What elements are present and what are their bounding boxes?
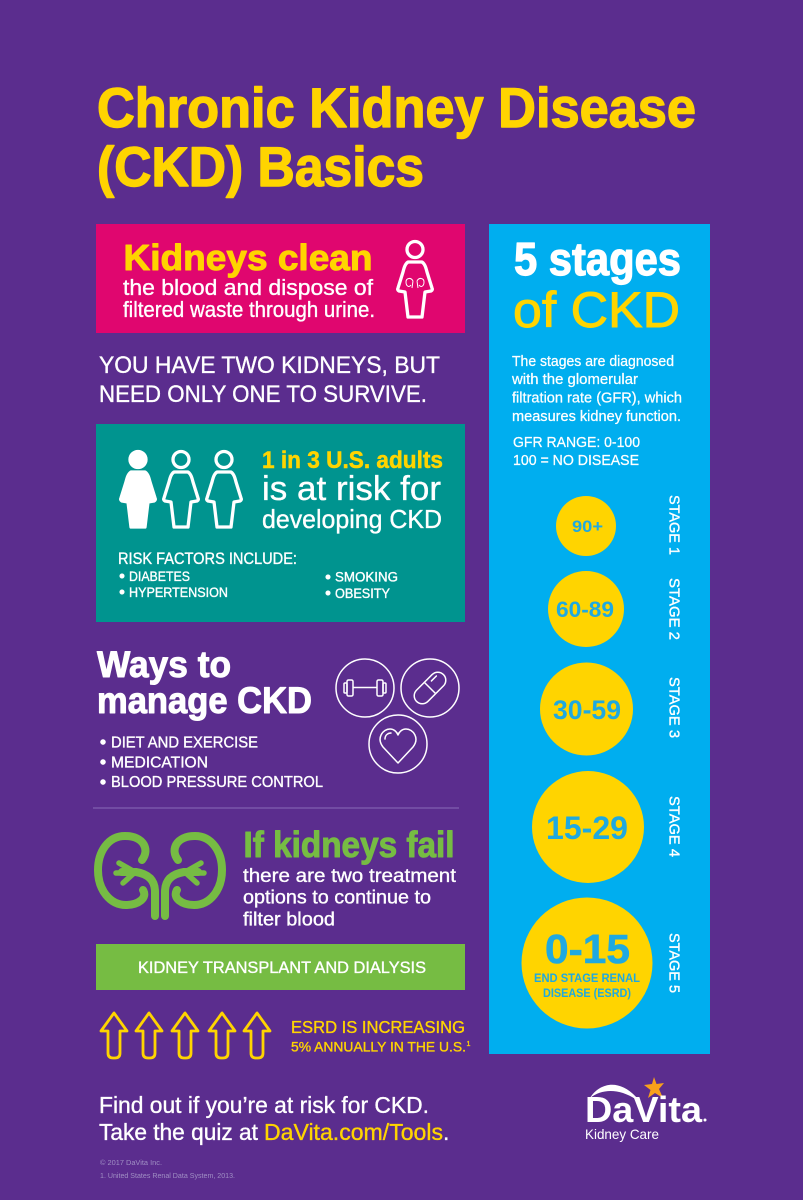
call to action: DaVita.com/Tools xyxy=(264,1119,443,1145)
panel: 5 stages of CKD xyxy=(489,224,710,1054)
logo: DaVita Kidney Care xyxy=(585,1077,706,1142)
text: treatment options: options to continue to xyxy=(243,886,431,908)
heading: kidneys clean: Kidneys clean xyxy=(124,237,372,278)
statistic: 1 in 3: developing CKD xyxy=(262,504,442,534)
heading: 5 stages: 5 stages xyxy=(514,233,681,285)
footnotes: © 2017 DaVita Inc. xyxy=(100,1159,162,1167)
stage 1: 90+ xyxy=(572,517,603,536)
icon: kidneys xyxy=(98,836,222,916)
heading: of CKD: of CKD xyxy=(513,282,680,338)
text: treatment options: filter blood xyxy=(243,908,335,930)
icon: dumbbell xyxy=(336,659,394,717)
logo: DaVita Kidney Care: DaVita xyxy=(585,1089,703,1130)
stage 3: 30-59 xyxy=(553,695,621,725)
stage 2 xyxy=(548,571,682,647)
stage 4 xyxy=(532,771,682,883)
icon: body with kidneys xyxy=(398,242,432,317)
text: GFR range: GFR RANGE: 0-100 xyxy=(513,435,640,451)
text: treatment options: there are two treatment xyxy=(243,865,457,887)
list: risk factors xyxy=(118,550,398,601)
panel: risk xyxy=(96,424,465,622)
list: risk factors: DIABETES xyxy=(129,569,190,584)
statistic: 1 in 3 xyxy=(262,447,443,534)
statement: two kidneys xyxy=(99,352,440,408)
icon: five up arrows xyxy=(101,1013,270,1058)
list: management: MEDICATION xyxy=(111,754,208,772)
banner: transplant and dialysis: KIDNEY TRANSPLANT AND DIALYSIS xyxy=(138,959,426,977)
stage 4: 15-29 xyxy=(546,810,628,846)
statistic: ESRD increasing: 5% ANNUALLY IN THE U.S. xyxy=(291,1038,466,1054)
list: management xyxy=(100,734,323,791)
stage 5: 0-15 xyxy=(545,926,630,972)
statistic: ESRD increasing: 1 xyxy=(466,1041,470,1048)
call to action: Take the quiz at xyxy=(99,1119,259,1145)
statistic: ESRD increasing xyxy=(291,1017,470,1054)
text: GFR description: with the glomerular xyxy=(511,372,638,388)
call to action xyxy=(99,1092,449,1145)
text: GFR range: 100 = NO DISEASE xyxy=(513,453,639,469)
title xyxy=(97,76,696,198)
heading: ways to manage CKD: manage CKD xyxy=(97,680,312,721)
statistic: 1 in 3: 1 in 3 U.S. adults xyxy=(262,447,443,474)
stage 2: STAGE 2 xyxy=(666,578,682,640)
list: management: BLOOD PRESSURE CONTROL xyxy=(111,774,323,791)
stage 5: STAGE 5 xyxy=(666,933,682,993)
logo: DaVita Kidney Care: Kidney Care xyxy=(585,1126,659,1142)
list: risk factors: RISK FACTORS INCLUDE: xyxy=(118,550,297,568)
footnotes: 1. United States Renal Data System, 2013. xyxy=(100,1173,235,1180)
banner: transplant and dialysis xyxy=(96,944,465,990)
list: management: DIET AND EXERCISE xyxy=(111,734,258,752)
icon: filled person xyxy=(121,452,155,527)
statement: two kidneys: NEED ONLY ONE TO SURVIVE. xyxy=(99,381,427,408)
section: ways to manage xyxy=(97,644,459,791)
title: (CKD) Basics xyxy=(97,135,424,198)
icon: outlined person xyxy=(207,452,241,527)
stage 5: END STAGE RENAL xyxy=(534,971,640,985)
stage 5: DISEASE (ESRD) xyxy=(543,986,631,1000)
stage 3: STAGE 3 xyxy=(666,677,682,738)
list: risk factors: SMOKING xyxy=(335,570,398,584)
text: treatment options xyxy=(243,865,457,930)
icon: outlined person xyxy=(164,452,198,527)
statistic: 1 in 3: is at risk for xyxy=(262,470,441,508)
statement: two kidneys: YOU HAVE TWO KIDNEYS, BUT xyxy=(99,352,440,379)
text: GFR range xyxy=(513,435,640,469)
stage 5 xyxy=(522,898,682,1028)
title: Chronic Kidney Disease xyxy=(97,76,696,139)
footnotes xyxy=(100,1159,235,1180)
text: GFR description: filtration rate (GFR), which xyxy=(512,390,682,406)
stage 3 xyxy=(540,662,682,756)
stage 2: 60-89 xyxy=(556,597,614,622)
text: kidney function: filtered waste through urine. xyxy=(123,297,375,322)
heading: ways to manage CKD: Ways to xyxy=(97,644,231,685)
statistic: ESRD increasing: ESRD IS INCREASING xyxy=(291,1017,465,1037)
section: if kidneys fail xyxy=(98,824,457,930)
stage 1 xyxy=(556,495,682,556)
stage 4: STAGE 4 xyxy=(666,796,682,857)
call to action: . xyxy=(443,1119,449,1145)
text: GFR description xyxy=(511,354,682,425)
list: risk factors: HYPERTENSION xyxy=(129,585,228,600)
call to action: Find out if you’re at risk for CKD. xyxy=(99,1092,429,1118)
icon: pill xyxy=(401,659,459,717)
stage 1: STAGE 1 xyxy=(666,495,682,555)
icon: heart xyxy=(369,715,427,773)
panel: kidneys clean xyxy=(96,224,465,333)
text: kidney function xyxy=(123,275,375,322)
list: risk factors: OBESITY xyxy=(335,586,390,601)
text: GFR description: The stages are diagnosed xyxy=(512,354,674,370)
text: kidney function: the blood and dispose of xyxy=(123,275,374,300)
text: GFR description: measures kidney function. xyxy=(512,409,681,425)
heading: if kidneys fail: If kidneys fail xyxy=(244,824,454,865)
heading: ways to manage CKD xyxy=(97,644,312,721)
